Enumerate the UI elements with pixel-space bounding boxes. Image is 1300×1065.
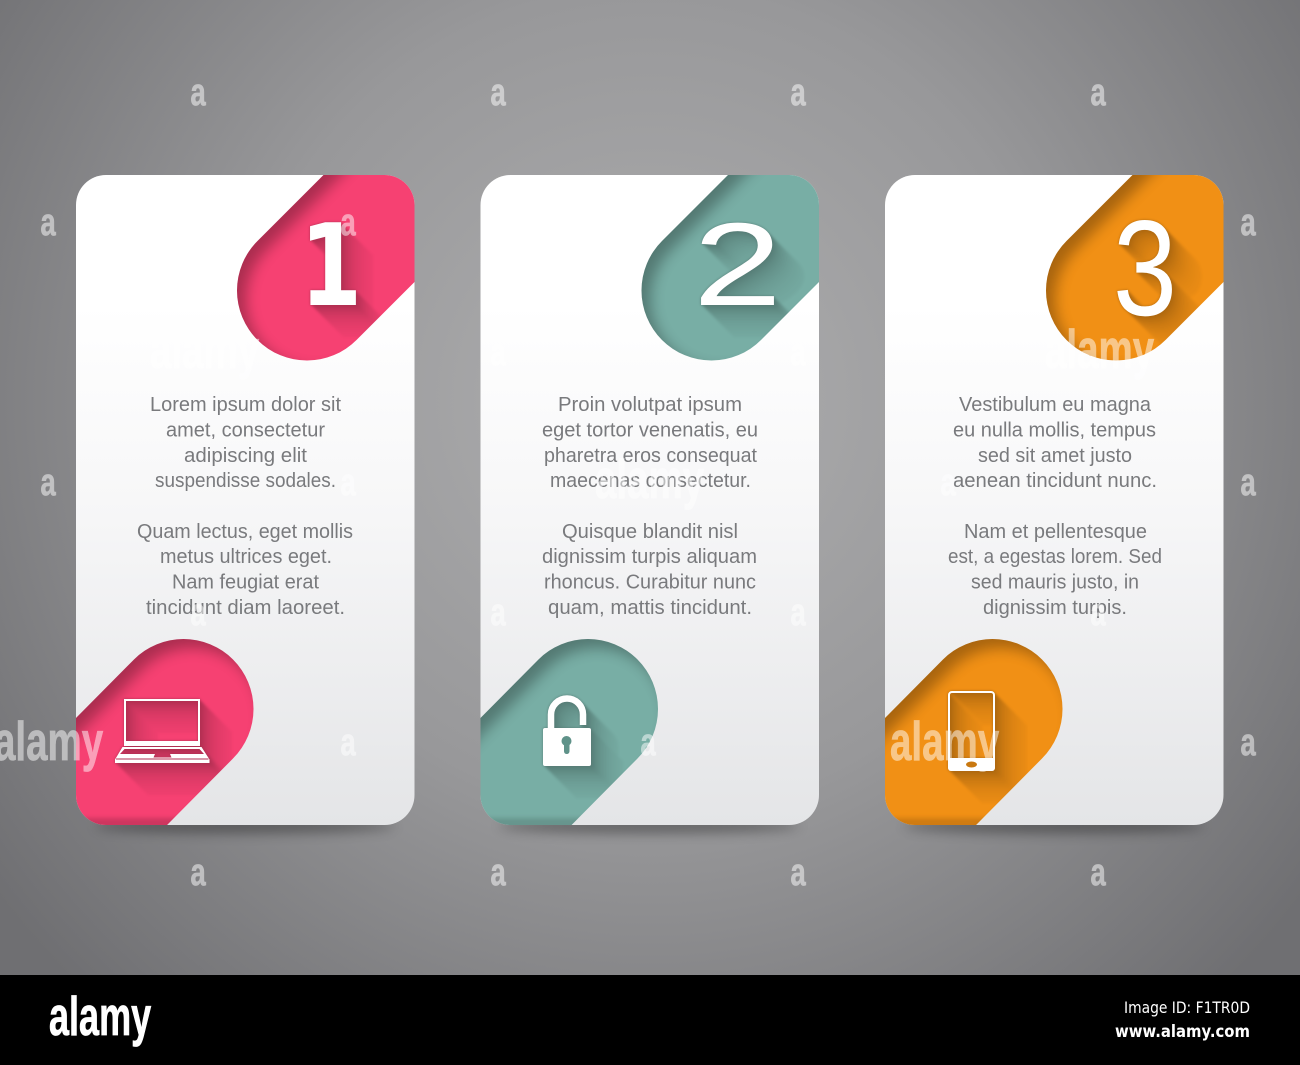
watermark: a (1240, 202, 1256, 244)
watermark: a (790, 332, 806, 374)
website: www.alamy.com (1115, 1022, 1250, 1042)
text block 3: sed mauris justo, in (971, 572, 1139, 594)
watermark: a (1090, 852, 1106, 894)
text block 3: Nam et pellentesque (964, 521, 1147, 543)
watermark: a (490, 592, 506, 634)
number 1: 1 (300, 200, 362, 332)
watermark: a (790, 592, 806, 634)
footer logo: alamy (49, 985, 151, 1047)
text block 2: maecenas consectetur. (550, 470, 751, 492)
watermark: a (490, 72, 506, 114)
watermark: a (790, 852, 806, 894)
text block 2: rhoncus. Curabitur nunc (544, 572, 756, 594)
card 1 (76, 175, 414, 839)
watermark: a (490, 852, 506, 894)
card 2 panel (480, 175, 819, 839)
text block 3: est, a egestas lorem. Sed (948, 546, 1162, 568)
icon: laptop (115, 700, 210, 763)
watermark: alamy (595, 449, 705, 511)
watermark: a (1240, 722, 1256, 764)
watermark: a (190, 592, 206, 634)
watermark: a (790, 72, 806, 114)
watermark: a (190, 852, 206, 894)
text block 1 (137, 394, 353, 619)
watermark (0, 72, 1256, 894)
icon: smartphone (948, 692, 995, 771)
image id: Image ID: F1TR0D (1124, 998, 1250, 1017)
watermark: a (1090, 592, 1106, 634)
watermark: a (640, 722, 656, 764)
text block 1: metus ultrices eget. (160, 546, 332, 568)
watermark: a (940, 462, 956, 504)
watermark: a (490, 332, 506, 374)
text block 1: Lorem ipsum dolor sit (150, 394, 341, 416)
text block 2: quam, mattis tincidunt. (548, 597, 752, 619)
text block 1: suspendisse sodales. (155, 470, 336, 492)
text block 1: amet, consectetur (166, 420, 325, 442)
card 2 (480, 175, 819, 839)
card 3 (885, 175, 1224, 839)
text block 2: Quisque blandit nisl (562, 521, 738, 543)
number 2: 2 (693, 199, 782, 331)
text block 3 (948, 394, 1162, 619)
text block 2: eget tortor venenatis, eu (542, 420, 758, 442)
text block 1: Nam feugiat erat (172, 572, 319, 594)
text block 1: Quam lectus, eget mollis (137, 521, 353, 543)
text block 3: Vestibulum eu magna (959, 394, 1152, 416)
card 3 panel (885, 175, 1224, 839)
watermark: a (340, 462, 356, 504)
icon: padlock (543, 698, 591, 766)
watermark: a (40, 462, 56, 504)
watermark: a (1240, 462, 1256, 504)
text block 2: dignissim turpis aliquam (542, 546, 757, 568)
watermark: a (340, 202, 356, 244)
watermark: a (1090, 72, 1106, 114)
text block 3: sed sit amet justo (978, 445, 1132, 467)
text block 2: pharetra eros consequat (544, 445, 757, 467)
watermark: alamy (890, 711, 1000, 773)
text block 3: aenean tincidunt nunc. (953, 470, 1157, 492)
text block 2 (542, 394, 758, 619)
text block 3: dignissim turpis. (983, 597, 1127, 619)
footer bar (0, 975, 1300, 1065)
watermark: a (190, 72, 206, 114)
text block 3: eu nulla mollis, tempus (953, 420, 1156, 442)
card 1 panel (76, 175, 414, 839)
text block 1: tincidunt diam laoreet. (146, 597, 345, 619)
watermark: alamy (1045, 319, 1155, 381)
text block 2: Proin volutpat ipsum (558, 394, 742, 416)
watermark: a (340, 722, 356, 764)
watermark: a (40, 202, 56, 244)
watermark: alamy (150, 319, 260, 381)
number 3: 3 (1113, 192, 1177, 344)
text block 1: adipiscing elit (184, 445, 307, 467)
